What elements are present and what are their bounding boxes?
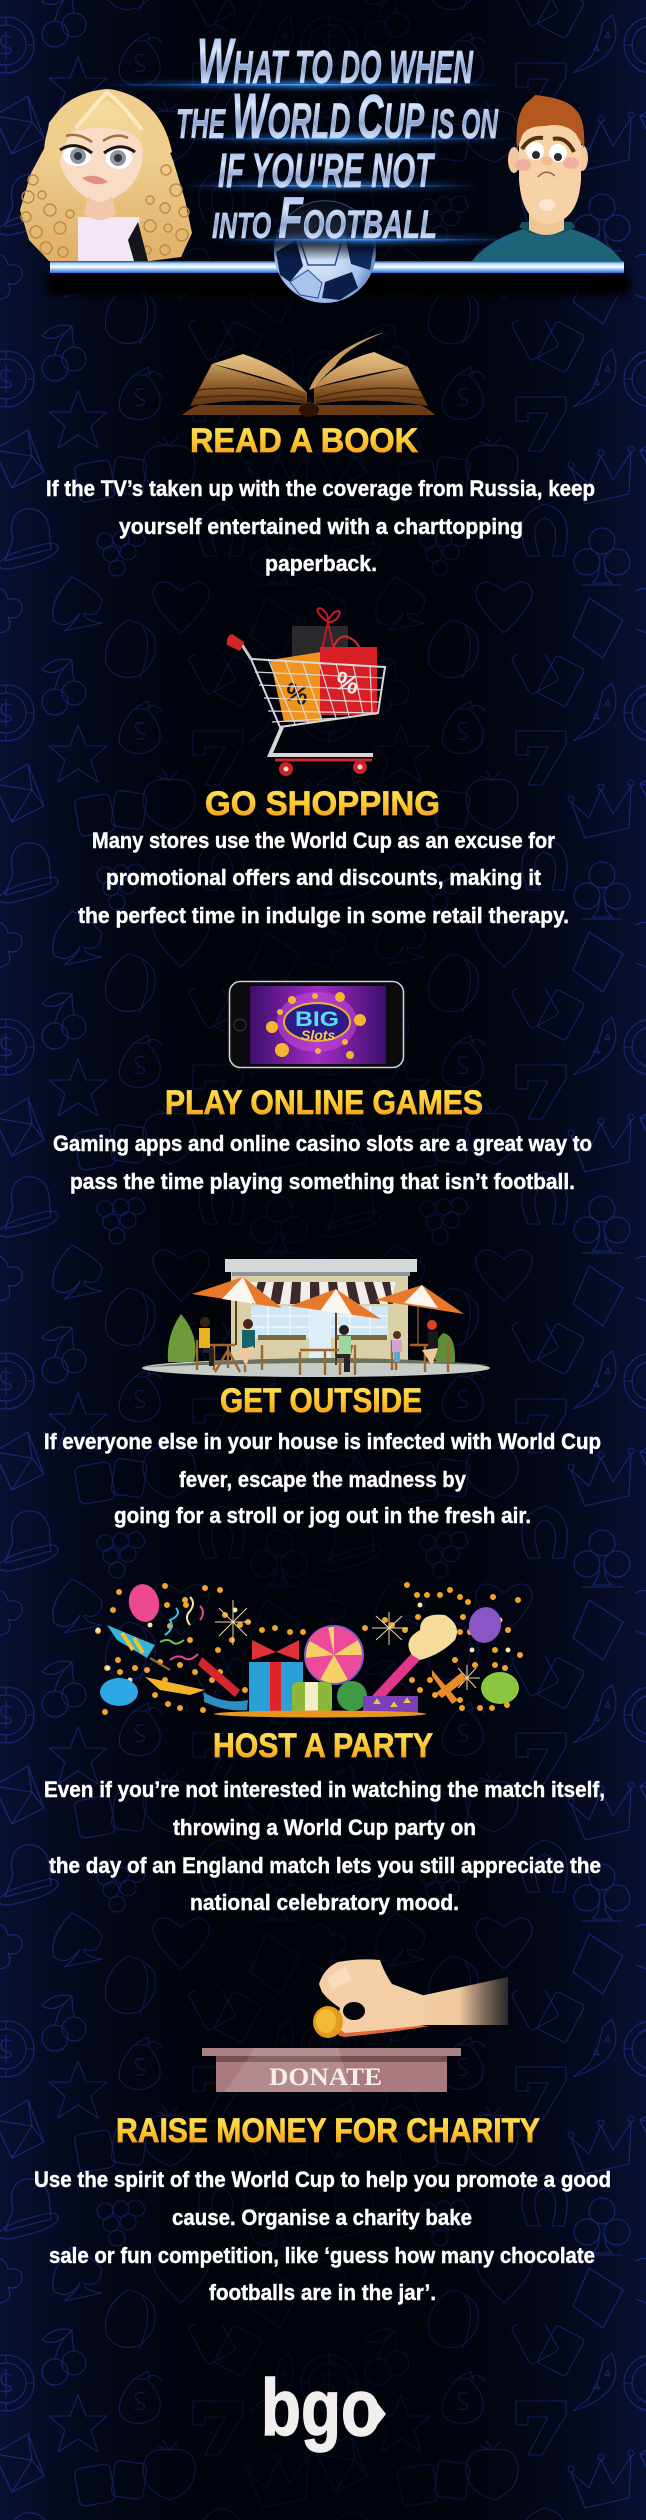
text block: yourself entertained with a charttopping xyxy=(119,514,523,539)
title: IF YOU'RE NOT xyxy=(218,145,435,198)
text block: going for a stroll or jog out in the fresh air. xyxy=(114,1503,531,1528)
text block xyxy=(46,476,595,576)
panel: raise money for charity xyxy=(34,1959,611,2305)
text block xyxy=(44,1777,605,1915)
text block: Use the spirit of the World Cup to help you promote a good xyxy=(34,2167,611,2192)
text block: paperback. xyxy=(265,551,377,576)
text block: the day of an England match lets you still appreciate the xyxy=(49,1853,601,1878)
banner bar xyxy=(50,261,624,273)
text block: sale or fun competition, like ‘guess how many chocolate xyxy=(49,2243,595,2268)
icon: open book xyxy=(182,332,435,417)
text block xyxy=(44,1429,601,1528)
logo: bgo: bgo xyxy=(261,2363,381,2452)
heading: RAISE MONEY FOR CHARITY xyxy=(116,2112,540,2150)
title glow lines xyxy=(103,82,515,242)
icon: soccer ball xyxy=(274,201,376,303)
title: INTO FOOTBALL xyxy=(212,186,437,251)
icon: blonde girl xyxy=(20,89,192,261)
text block: national celebratory mood. xyxy=(190,1890,459,1915)
donate box: DONATE xyxy=(269,2064,382,2091)
title xyxy=(176,25,499,251)
panel: go shopping xyxy=(78,608,569,928)
text block: fever, escape the madness by xyxy=(179,1467,467,1492)
panel: read a book xyxy=(46,332,595,576)
text block: If the TV’s taken up with the coverage from Russia, keep xyxy=(46,476,595,501)
text block: pass the time playing something that isn’t football. xyxy=(70,1169,575,1194)
title: WHAT TO DO WHEN xyxy=(197,25,473,97)
panel: play online games xyxy=(53,982,592,1194)
icon: shopping cart: % xyxy=(281,676,313,711)
icon: worried man xyxy=(472,95,622,261)
title: THE WORLD CUP IS ON xyxy=(176,80,499,152)
text block: Gaming apps and online casino slots are a great way to xyxy=(53,1131,592,1156)
text block: the perfect time in indulge in some retail therapy. xyxy=(78,903,569,928)
icon: hand dropping coin xyxy=(313,1959,508,2038)
banner shadow xyxy=(46,273,630,295)
text block: footballs are in the jar’. xyxy=(209,2280,436,2305)
icon: party fireworks xyxy=(98,1581,520,1718)
header banner xyxy=(20,25,630,303)
text block xyxy=(34,2167,611,2305)
panel: get outside xyxy=(44,1259,601,1528)
text block xyxy=(53,1131,592,1194)
text block: Even if you’re not interested in watching the match itself, xyxy=(44,1777,605,1802)
icon: cafe terrace xyxy=(142,1259,490,1377)
icon: shopping cart xyxy=(227,608,385,776)
text block: cause. Organise a charity bake xyxy=(172,2205,472,2230)
heading: PLAY ONLINE GAMES xyxy=(165,1084,483,1122)
icon: phone with slots game: Slots xyxy=(301,1027,335,1043)
icon: phone with slots game xyxy=(230,982,404,1068)
text block: throwing a World Cup party on xyxy=(173,1815,476,1840)
text block: promotional offers and discounts, making it xyxy=(106,865,542,890)
heading: READ A BOOK xyxy=(190,422,418,460)
donate box xyxy=(202,2048,461,2092)
text block: If everyone else in your house is infected with World Cup xyxy=(44,1429,601,1454)
heading: GET OUTSIDE xyxy=(220,1382,422,1420)
heading: HOST A PARTY xyxy=(213,1727,433,1765)
text block: Many stores use the World Cup as an excuse for xyxy=(92,828,555,853)
heading: GO SHOPPING xyxy=(205,785,440,823)
panel: host a party xyxy=(44,1581,605,1915)
icon: phone with slots game: BIG xyxy=(295,1008,339,1031)
icon: shopping cart: % xyxy=(332,665,363,700)
text block xyxy=(78,828,569,928)
